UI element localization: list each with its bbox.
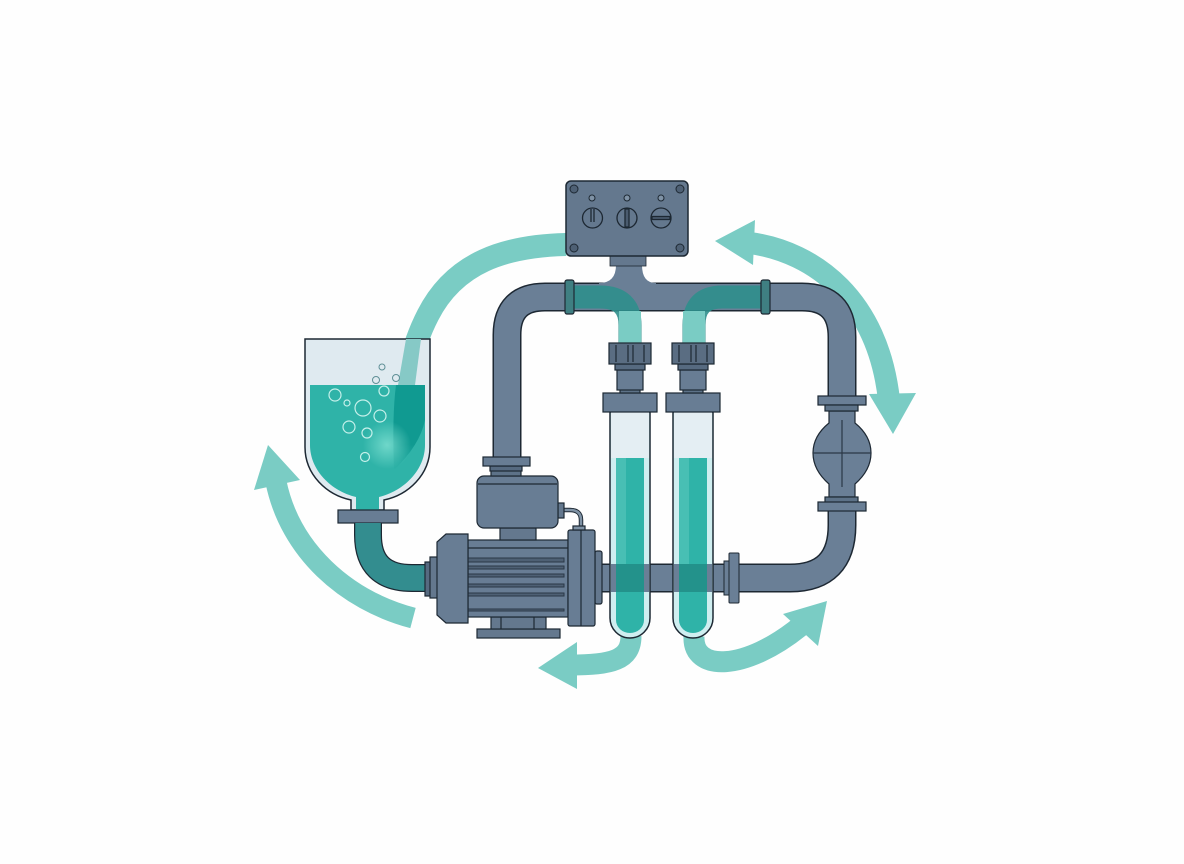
teal flow inside manifold <box>574 297 761 343</box>
test tube: right <box>666 343 720 638</box>
arrow: lower left arc <box>254 445 413 618</box>
beaker outlet flange <box>338 510 398 523</box>
overlapping arrow inside beaker <box>393 385 425 470</box>
test tube: left <box>603 343 657 638</box>
indicator lights <box>589 195 664 201</box>
beaker liquid <box>310 385 425 510</box>
motor right cap <box>595 551 602 604</box>
pipe: top manifold and right riser <box>507 265 842 458</box>
tube cap and coupling <box>666 343 720 412</box>
connector conduit <box>563 510 581 530</box>
tube liquid <box>679 458 707 633</box>
arrow: double-headed arc top right <box>715 220 916 434</box>
arrow: bottom right outflow <box>694 601 827 662</box>
screws <box>570 185 684 252</box>
valve <box>813 396 871 511</box>
tube liquid <box>616 458 644 633</box>
control box <box>566 181 688 266</box>
arrow: bottom left return <box>538 636 631 689</box>
motor body <box>468 540 568 617</box>
pipe: lower return line <box>600 510 842 603</box>
motor left cap <box>425 562 432 596</box>
tube glass <box>610 412 650 638</box>
tube glass <box>673 412 713 638</box>
pump base <box>477 629 560 638</box>
beaker <box>305 339 430 510</box>
arrow: large arc from control box to beaker <box>397 244 566 450</box>
cooling fins <box>468 558 564 611</box>
housing flange <box>491 470 521 476</box>
bubbles <box>329 386 389 462</box>
pipe clamps <box>565 280 770 314</box>
outlet elbow pipe with teal fluid <box>368 523 426 578</box>
pump housing <box>500 528 536 540</box>
centrifugal pump motor <box>425 457 602 638</box>
pipe: T connector to control box <box>599 265 656 300</box>
tube cap and coupling <box>603 343 657 412</box>
dials <box>582 208 671 228</box>
